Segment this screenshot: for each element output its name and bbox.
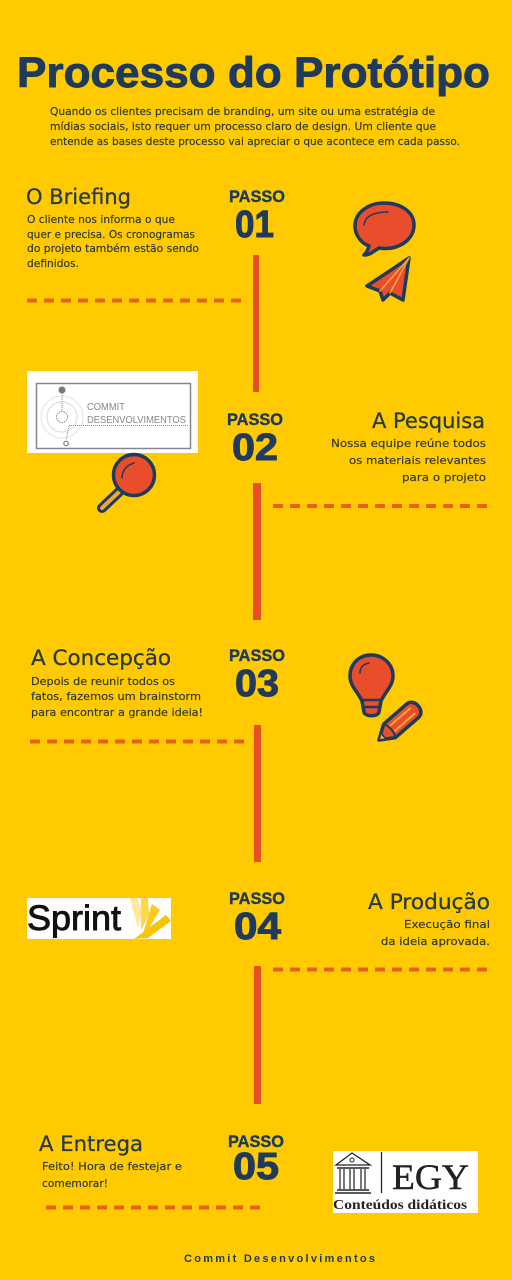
step 2 text: para o projeto <box>402 471 486 484</box>
step 4 text <box>381 918 490 948</box>
step 1 text: quer e precisa. Os cronogramas <box>27 228 195 241</box>
step 3 label: PASSO <box>229 647 285 665</box>
step 4 label: PASSO <box>229 890 285 908</box>
icon: magnifying glass <box>102 454 154 508</box>
step 5 label: 05 <box>233 1146 279 1188</box>
step 1 text: do projeto também estão sendo <box>27 242 199 255</box>
egy logo: Conteúdos didáticos <box>333 1198 468 1213</box>
step 4 heading: A Produção <box>368 890 490 914</box>
step 1 text: definidos. <box>27 257 79 270</box>
step 3 label: 03 <box>235 663 279 705</box>
step 2 heading: A Pesquisa <box>372 409 485 433</box>
title: Processo do Protótipo <box>17 49 490 97</box>
step 4 dashed connector <box>273 968 488 972</box>
sprint logo <box>27 898 171 939</box>
intro text: mídias sociais, isto requer um processo claro de design. Um cliente que <box>50 120 436 133</box>
step 2 text <box>331 437 486 484</box>
step 4 text: Execução final <box>404 918 490 931</box>
step 2 label: 02 <box>232 427 278 469</box>
egy logo <box>333 1151 478 1213</box>
step 3 text: Depois de reunir todos os <box>31 675 175 688</box>
step 1 label: 01 <box>235 204 274 246</box>
intro text: entende as bases deste processo vai apreciar o que acontece em cada passo. <box>50 135 460 148</box>
step 2 dashed connector <box>273 504 488 508</box>
step 2 panel <box>27 371 488 620</box>
commit logo: DESENVOLVIMENTOS <box>87 415 186 426</box>
step 5 text: Feito! Hora de festejar e <box>42 1160 182 1173</box>
step 5 label: PASSO <box>228 1133 284 1151</box>
step 5 heading: A Entrega <box>39 1132 143 1156</box>
step 5 panel <box>39 1132 478 1213</box>
step 1 label: PASSO <box>229 188 285 206</box>
commit logo <box>27 371 198 453</box>
step 4 label: 04 <box>234 906 281 948</box>
step 3 text: para encontrar a grande ideia! <box>31 706 203 719</box>
step 1 dashed connector <box>27 298 242 302</box>
step 4 label <box>229 890 285 948</box>
step 3 heading: A Concepção <box>31 646 171 670</box>
step 3 label <box>229 647 285 705</box>
step 3 text <box>31 675 203 719</box>
step 1 heading: O Briefing <box>26 185 131 209</box>
egy logo: EGY <box>392 1157 469 1197</box>
step 5 text <box>42 1160 182 1190</box>
icon: light bulb <box>350 655 393 716</box>
step 2 label: PASSO <box>227 411 283 429</box>
step 1 text <box>27 213 199 270</box>
step 4 text: da ideia aprovada. <box>381 935 490 948</box>
step 5 label <box>228 1133 284 1188</box>
icon: paper plane <box>367 258 409 300</box>
step 3 dashed connector <box>30 740 245 744</box>
step 1 label <box>229 188 285 246</box>
step 1 timeline line <box>253 255 259 392</box>
footer: Commit Desenvolvimentos <box>184 1253 375 1265</box>
intro text <box>50 105 460 148</box>
step 4 timeline line <box>254 966 261 1104</box>
step 3 panel <box>30 646 424 862</box>
icon: speech bubble <box>355 203 414 255</box>
commit logo: COMMIT <box>87 402 125 413</box>
intro text: Quando os clientes precisam de branding, um site ou uma estratégia de <box>50 105 435 118</box>
step 2 text: os materiais relevantes <box>349 454 486 467</box>
step 2 label <box>227 411 283 469</box>
step 5 text: comemorar! <box>42 1177 108 1190</box>
sprint logo: Sprint <box>27 899 121 938</box>
step 1 text: O cliente nos informa o que <box>27 213 175 226</box>
step 2 text: Nossa equipe reúne todos <box>331 437 486 450</box>
step 4 panel <box>27 890 490 1104</box>
step 3 timeline line <box>254 725 261 862</box>
step 5 dashed connector <box>46 1206 261 1210</box>
step 3 text: fatos, fazemos um brainstorm <box>31 690 201 703</box>
icon: pencil <box>373 699 424 747</box>
step 1 panel <box>26 185 414 392</box>
step 2 timeline line <box>253 483 261 620</box>
